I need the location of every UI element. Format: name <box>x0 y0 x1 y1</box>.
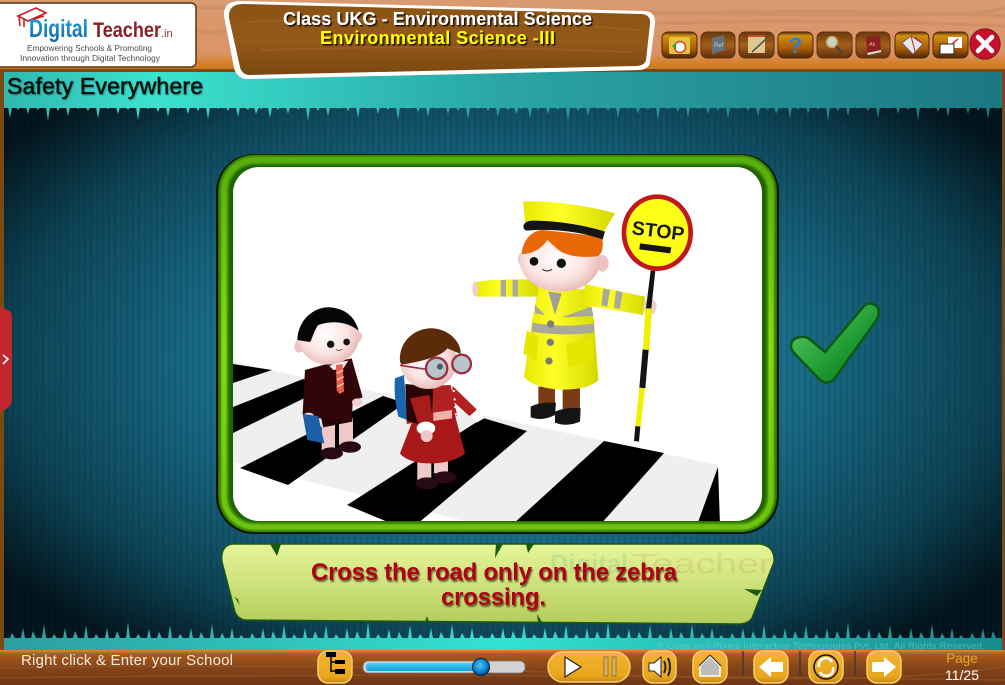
page counter: 11/25 <box>945 667 979 683</box>
children figures <box>294 307 484 489</box>
stop sign <box>624 197 691 269</box>
icon: refresh button <box>809 651 843 683</box>
icon: notepad <box>739 32 774 58</box>
top wooden bar <box>0 0 1005 72</box>
zebra crossing <box>233 362 720 530</box>
copyright line: © Code and Pixels Interactive Technologies Pvt. Ltd. All Rights Reserved. <box>657 641 985 652</box>
icon: timer folder <box>662 32 697 58</box>
title text: Class UKG - Environmental Science <box>283 9 592 29</box>
picture frame <box>216 154 779 534</box>
logo panel <box>0 3 196 67</box>
icon: help question mark <box>778 32 813 58</box>
school prompt text: Right click & Enter your School <box>21 652 233 669</box>
caption text: Cross the road only on the zebra <box>311 559 678 586</box>
page counter: Page <box>946 651 978 666</box>
progress slider <box>363 658 525 676</box>
logo tagline: Innovation through Digital Technology <box>20 53 161 63</box>
watermark <box>550 548 772 579</box>
logo wordmark: Digital <box>29 15 88 43</box>
logo tagline: Empowering Schools & Promoting <box>27 43 152 53</box>
icon: red dictionary <box>856 32 890 58</box>
check mark <box>791 303 879 383</box>
logo wordmark <box>29 15 173 43</box>
stop sign: STOP <box>631 218 686 246</box>
icon: window resize <box>933 32 968 58</box>
icon: contents tree button <box>318 651 352 683</box>
banner torn notches <box>234 544 762 622</box>
icon: home button <box>693 651 727 683</box>
caption text: crossing. <box>441 584 546 611</box>
subtitle text: Environmental Science -III <box>320 28 555 48</box>
bottom wooden bar <box>0 650 1005 685</box>
logo wordmark: .in <box>161 28 173 40</box>
logo wordmark: Teacher <box>93 19 161 42</box>
icon: reference book <box>701 32 735 58</box>
icon: forward arrow button <box>867 651 901 683</box>
icon: red dictionary: Ak <box>869 42 876 48</box>
toolbar icons <box>662 29 1000 59</box>
caption banner <box>222 544 774 624</box>
logo tagline <box>20 43 161 63</box>
caption text <box>311 559 678 611</box>
illustration panel <box>233 167 762 530</box>
icon: graduation cap <box>18 8 46 27</box>
boy figure <box>294 307 363 459</box>
icon: reference book: Ref <box>714 43 724 49</box>
side tab <box>0 307 12 412</box>
icon: speaker button <box>643 651 676 683</box>
girl figure <box>395 328 484 489</box>
crossing officer figure <box>472 197 691 442</box>
icon: back arrow button <box>754 651 788 683</box>
watermark: Teacher <box>632 548 772 579</box>
watermark: Digital <box>550 549 628 579</box>
icon: help question mark: ? <box>789 33 802 58</box>
play and pause control <box>548 652 630 682</box>
icon: magnifier <box>817 32 852 58</box>
page heading: Safety Everywhere <box>7 73 203 99</box>
page counter <box>945 651 979 683</box>
icon: open book <box>895 32 929 58</box>
title plaque <box>224 1 655 79</box>
icon: close button <box>970 29 1000 59</box>
